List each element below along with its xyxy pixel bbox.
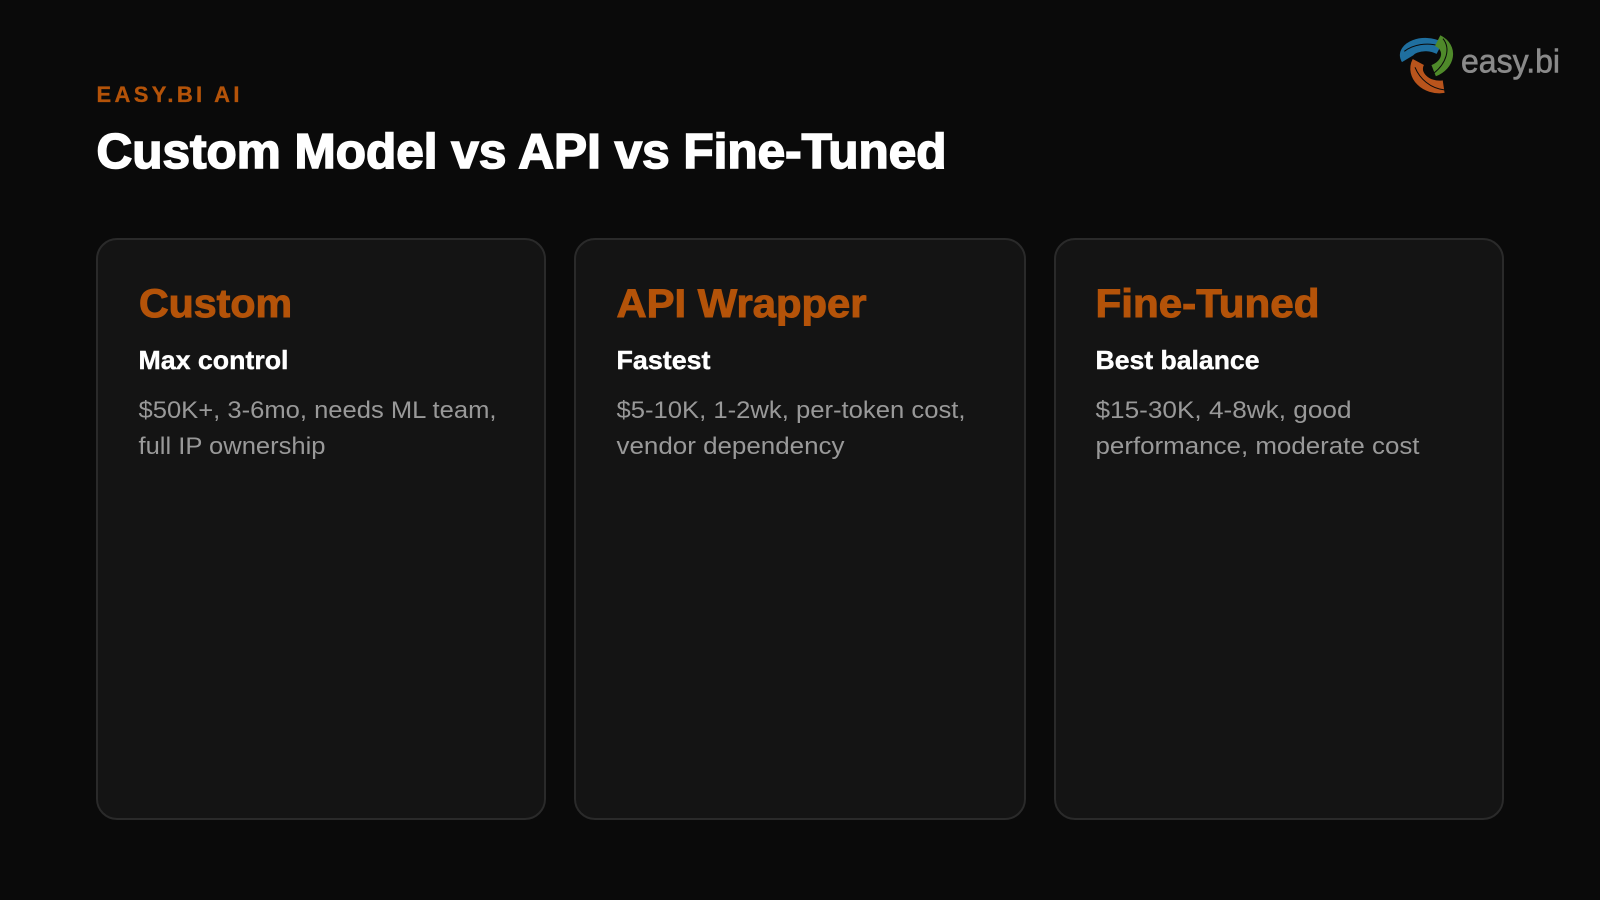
- panel: Fine-Tuned: [1055, 239, 1503, 819]
- panel: API Wrapper: [575, 239, 1025, 819]
- logo: easy.bi: [1404, 39, 1560, 90]
- subheading: Max control: Max control: [138, 345, 288, 375]
- description: API Wrapper: [616, 397, 966, 460]
- description: Custom: [138, 397, 496, 460]
- description: Custom: full IP ownership: [138, 433, 326, 460]
- panel: Custom: [97, 239, 545, 819]
- description: Fine-Tuned: [1096, 397, 1420, 460]
- eyebrow label: EASY.BI AI: [96, 82, 240, 107]
- logo wordmark: easy.bi: [1461, 42, 1560, 80]
- description: Fine-Tuned: $15-30K, 4-8wk, good: [1096, 397, 1352, 424]
- title: Custom Model vs API vs Fine-Tuned: [96, 125, 946, 179]
- description: Custom: $50K+, 3-6mo, needs ML team,: [138, 397, 496, 424]
- subheading: Best balance: Best balance: [1096, 345, 1260, 375]
- description: API Wrapper: vendor dependency: [616, 433, 844, 460]
- icon: logo mark: [1404, 39, 1447, 90]
- heading: API Wrapper: API Wrapper: [616, 282, 866, 326]
- description: Fine-Tuned: performance, moderate cost: [1096, 433, 1420, 460]
- heading: Custom: Custom: [139, 282, 292, 326]
- description: API Wrapper: $5-10K, 1-2wk, per-token cost,: [616, 397, 966, 424]
- heading: Fine-Tuned: Fine-Tuned: [1096, 282, 1320, 326]
- subheading: Fastest: Fastest: [616, 345, 711, 375]
